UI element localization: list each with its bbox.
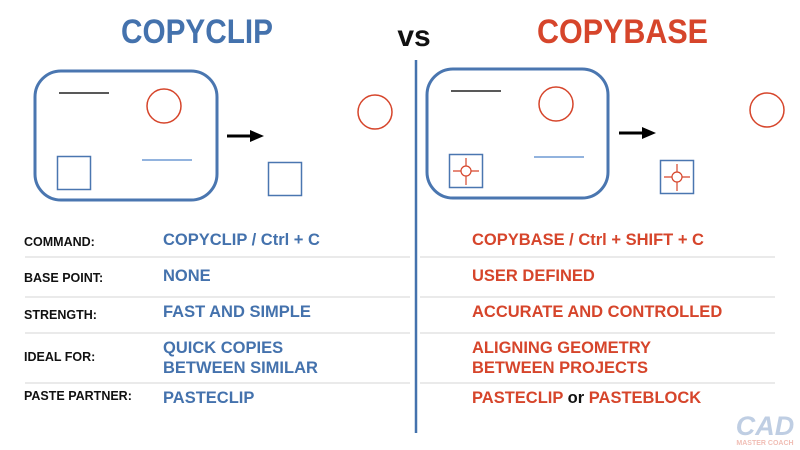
copybase values: ACCURATE AND CONTROLLED	[472, 303, 722, 321]
copybase values: PASTECLIP or PASTEBLOCK	[472, 389, 701, 407]
copybase values: BETWEEN PROJECTS	[472, 359, 648, 377]
row labels: STRENGTH:	[24, 308, 97, 322]
copyclip values	[163, 231, 320, 407]
copybase values	[472, 231, 722, 407]
row labels: PASTE PARTNER:	[24, 389, 132, 403]
row labels: IDEAL FOR:	[24, 350, 95, 364]
copyclip values: QUICK COPIES	[163, 339, 283, 357]
copyclip values: NONE	[163, 267, 211, 285]
row labels: COMMAND:	[24, 235, 95, 249]
copybase values: USER DEFINED	[472, 267, 595, 285]
logo: CAD	[736, 411, 794, 441]
arrow	[619, 127, 656, 139]
divider	[415, 60, 417, 433]
copyclip values: COPYCLIP / Ctrl + C	[163, 231, 320, 249]
copybase values: ALIGNING GEOMETRY	[472, 339, 651, 357]
diagram: copybase	[427, 69, 784, 198]
copybase values: COPYBASE / Ctrl + SHIFT + C	[472, 231, 704, 249]
diagram: copyclip	[35, 71, 392, 200]
copyclip values: PASTECLIP	[163, 389, 254, 407]
logo: MASTER COACH	[736, 440, 794, 447]
copyclip values: FAST AND SIMPLE	[163, 303, 311, 321]
row labels: BASE POINT:	[24, 271, 103, 285]
title: COPYCLIP: COPYCLIP	[121, 13, 273, 51]
title: COPYBASE: COPYBASE	[537, 13, 708, 51]
copyclip values: BETWEEN SIMILAR	[163, 359, 318, 377]
arrow	[227, 130, 264, 142]
row labels	[24, 235, 132, 403]
title: vs: vs	[397, 20, 431, 53]
